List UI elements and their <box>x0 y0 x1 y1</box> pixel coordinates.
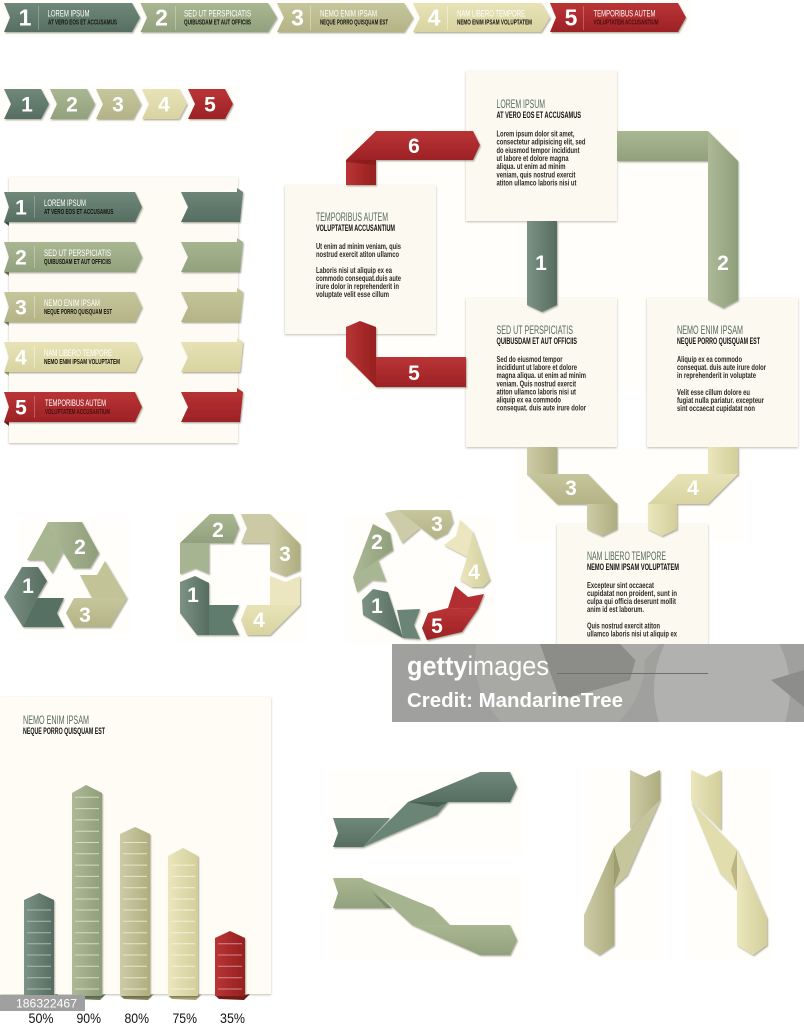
card: temporibus autem <box>285 185 436 334</box>
card: lorem ipsum: AT VERO EOS ET ACCUSAMUS <box>496 110 581 120</box>
image id tag <box>0 995 85 1011</box>
pentagon segment 2: 2 <box>371 531 383 554</box>
chevron 2: 2 <box>155 4 168 30</box>
list row 3 <box>4 292 142 326</box>
card: lorem ipsum: atiton ullamco laboris nisi ut <box>496 178 577 187</box>
small chevron 1 <box>4 89 49 119</box>
card: nam libero tempore: NAM LIBERO TEMPORE <box>587 549 666 563</box>
three-step triangle cycle <box>4 522 127 627</box>
small chevron 3: 3 <box>112 94 124 116</box>
chevron 1: 1 <box>19 4 32 30</box>
card: temporibus autem: TEMPORIBUS AUTEM <box>316 210 388 224</box>
flow ribbon 1 <box>527 221 557 312</box>
card: nam libero tempore: culpa qui officia deserunt mollit <box>587 597 676 606</box>
card: nam libero tempore: ullamco laboris nisi ut aliquip ex <box>587 630 677 638</box>
twisted ribbon: green falling <box>333 878 517 955</box>
card: temporibus autem: voluptate velit esse cillum <box>316 290 389 299</box>
chevron 4: NAM LIBERO TEMPORE <box>457 8 525 20</box>
list row 1: 1 <box>15 196 27 220</box>
list row 4: NEMO ENIM IPSAM VOLUPTATEM <box>44 357 120 366</box>
card: temporibus autem: Ut enim ad minim veniam, quis <box>316 242 401 251</box>
bar 90% <box>72 785 106 1000</box>
pentagon segment 1: 1 <box>371 595 383 618</box>
blank flag ribbons <box>181 188 243 422</box>
flow ribbon 6: 6 <box>408 135 420 158</box>
panel: bar chart <box>0 697 271 1024</box>
card: sed ut perspiciatis: veniam. Quis nostrud exercit <box>496 379 576 388</box>
card: lorem ipsum: LOREM IPSUM <box>496 97 545 111</box>
flow ribbon 1: 1 <box>535 252 547 275</box>
chevron 5 <box>550 3 686 32</box>
chevron 2: SED UT PERSPICIATIS <box>184 8 251 20</box>
chevron 1 <box>4 3 140 32</box>
square segment 1: 1 <box>187 584 199 607</box>
four-step square cycle <box>180 514 300 635</box>
card: sed ut perspiciatis: aliquip ex ea commodo <box>496 396 561 404</box>
bar 35% <box>215 931 250 1000</box>
chevron 2: QUIBUSDAM ET AUT OFFICIIS <box>184 18 251 26</box>
image id tag: 186322467 <box>16 996 77 1010</box>
list row 1 <box>4 192 142 226</box>
card: sed ut perspiciatis <box>466 298 617 447</box>
card: nemo enim ipsam: Aliquip ex ea commodo <box>677 355 742 364</box>
card: temporibus autem: irure dolor in reprehenderit in <box>316 282 399 291</box>
chevron 3: NEMO ENIM IPSAM <box>320 8 377 20</box>
card: sed ut perspiciatis: incididunt ut labore et dolore <box>496 363 577 372</box>
small chevron 1: 1 <box>21 94 33 116</box>
watermark banner <box>392 644 804 722</box>
card: sed ut perspiciatis: magna aliqua. ut enim ad minim <box>496 371 586 380</box>
getty images logo text: gettyimages <box>407 651 549 681</box>
card: lorem ipsum: Lorem ipsum dolor sit amet, <box>496 130 574 138</box>
percentage labels <box>28 1010 245 1024</box>
bar 50% <box>24 893 58 1000</box>
chevron 4: 4 <box>428 4 441 30</box>
chart heading: NEMO ENIM IPSAM <box>23 713 89 727</box>
card: temporibus autem: commodo consequat.duis aute <box>316 274 401 283</box>
chevron 5: TEMPORIBUS AUTEM <box>594 8 656 20</box>
card: nam libero tempore: Excepteur sint occaecat <box>587 581 654 590</box>
chevron 1: AT VERO EOS ET ACCUSAMUS <box>48 18 117 26</box>
triangle segment 2: 2 <box>74 536 86 559</box>
list row 2: QUIBUSDAM ET AUT OFFICIIS <box>44 257 111 266</box>
chevron 3: 3 <box>291 4 304 30</box>
card: nam libero tempore: anim id est laborum. <box>587 605 644 614</box>
card: sed ut perspiciatis: consequat. duis aute irure dolor <box>496 404 586 413</box>
list row 5: 5 <box>15 396 27 420</box>
small chevron 2 <box>50 89 95 119</box>
card: lorem ipsum: ut labore et dolore magna <box>496 154 569 163</box>
pentagon segment 4: 4 <box>468 561 480 584</box>
chevron 1: LOREM IPSUM <box>48 8 90 20</box>
card: sed ut perspiciatis: Sed do eiusmod tempor <box>496 355 562 364</box>
card: sed ut perspiciatis: SED UT PERSPICIATIS <box>496 323 573 337</box>
twisted ribbon: olive downward <box>584 770 660 955</box>
flow ribbon 4: 4 <box>687 477 699 500</box>
list row 5 <box>4 392 142 426</box>
flow ribbon 5: 5 <box>408 362 420 385</box>
flow ribbon 2 <box>617 131 738 308</box>
card: sed ut perspiciatis: atiton ullamco laboris nisi ut <box>496 387 576 396</box>
card: nam libero tempore <box>557 524 708 674</box>
chevron 3: NEQUE PORRO QUISQUAM EST <box>320 18 388 26</box>
small chevron 4: 4 <box>158 94 170 116</box>
list row 4: NAM LIBERO TEMPORE <box>44 348 112 359</box>
list row 1: LOREM IPSUM <box>44 198 86 209</box>
chevron 2 <box>140 3 277 32</box>
small chevron 5: 5 <box>204 94 216 116</box>
credit line: Credit: MandarineTree <box>407 690 623 712</box>
square segment 3: 3 <box>279 543 291 566</box>
chevron 5: VOLUPTATEM ACCUSANTIUM <box>594 18 658 26</box>
card: lorem ipsum: veniam, quis nostrud exercit <box>496 170 576 179</box>
card: lorem ipsum: consectetur adipisicing elit, sed <box>496 138 586 147</box>
list row 2: 2 <box>15 246 27 270</box>
card: nemo enim ipsam: Velit esse cillum dolore eu <box>677 388 750 397</box>
five-step pentagon cycle <box>353 510 490 640</box>
card: sed ut perspiciatis: QUIBUSDAM ET AUT OFFICIIS <box>496 336 577 346</box>
card: nam libero tempore: NEMO ENIM IPSAM VOLUPTATEM <box>587 562 679 572</box>
chevron 5: 5 <box>565 4 578 30</box>
card: nemo enim ipsam: fugiat nulla pariatur. excepteur <box>677 396 764 405</box>
square segment 2: 2 <box>212 519 224 542</box>
twisted ribbon: dark green rising <box>333 772 517 847</box>
small chevron 3 <box>96 89 141 119</box>
flow ribbon 4 <box>648 447 738 536</box>
top chevron bar with text <box>4 3 686 32</box>
triangle segment 3: 3 <box>79 604 91 627</box>
bar 80% <box>120 827 154 1000</box>
list row 4 <box>4 342 142 376</box>
card: temporibus autem: Laboris nisi ut aliquip ex ea <box>316 266 392 275</box>
list row 1: AT VERO EOS ET ACCUSAMUS <box>44 207 114 216</box>
pentagon segment 3: 3 <box>431 513 443 536</box>
card: temporibus autem: nostrud exercit atiton ullamco <box>316 250 399 259</box>
chart heading <box>23 713 105 736</box>
small chevron 2: 2 <box>66 94 78 116</box>
card: temporibus autem: VOLUPTATEM ACCUSANTIUM <box>316 223 395 233</box>
pentagon segment 5: 5 <box>431 615 443 638</box>
list row 3: 3 <box>15 296 27 320</box>
flow ribbon 6 <box>346 131 480 185</box>
small chevron 4 <box>142 89 187 119</box>
list row 4: 4 <box>15 346 27 370</box>
list row 3: NEMO ENIM IPSAM <box>44 298 100 309</box>
list row 2 <box>4 242 142 276</box>
list row 5: VOLUPTATEM ACCUSANTIUM <box>45 407 110 416</box>
list row 2: SED UT PERSPICIATIS <box>44 248 111 259</box>
list row 3: NEQUE PORRO QUISQUAM EST <box>44 307 112 316</box>
list row 5: TEMPORIBUS AUTEM <box>45 398 106 409</box>
card: nam libero tempore: cupidatat non proident, sunt in <box>587 589 677 598</box>
card: nemo enim ipsam: in reprehenderit in voluptate <box>677 371 756 380</box>
triangle segment 1: 1 <box>22 575 34 598</box>
card: nemo enim ipsam <box>647 298 798 447</box>
card: lorem ipsum <box>466 71 617 221</box>
chevron 3 <box>277 3 413 32</box>
chevron 4: NEMO ENIM IPSAM VOLUPTATEM <box>457 18 532 26</box>
card: nemo enim ipsam: consequat. duis aute irure dolor <box>677 363 766 372</box>
flow ribbon 3 <box>527 447 617 536</box>
card: nam libero tempore: Quis nostrud exercit atiton <box>587 622 660 630</box>
flow ribbon 2: 2 <box>717 252 729 275</box>
panel: ribbon list <box>4 177 243 443</box>
square segment 4: 4 <box>253 609 265 632</box>
card: nemo enim ipsam: sint occaecat cupidatat non <box>677 404 755 413</box>
card: nemo enim ipsam: NEMO ENIM IPSAM <box>677 323 743 337</box>
twisted ribbon: cream downward <box>691 770 767 955</box>
flow ribbon 5 <box>346 321 466 387</box>
card: lorem ipsum: do eiusmod tempor incididunt <box>496 146 580 155</box>
small chevron 5 <box>188 89 233 119</box>
flow ribbon 3: 3 <box>565 477 577 500</box>
chart heading: NEQUE PORRO QUISQUAM EST <box>23 726 105 736</box>
card: lorem ipsum: aliqua. ut enim ad minim <box>496 162 566 171</box>
chevron 4 <box>413 3 550 32</box>
bar 75% <box>168 848 202 1000</box>
small numbered chevrons <box>4 89 233 119</box>
